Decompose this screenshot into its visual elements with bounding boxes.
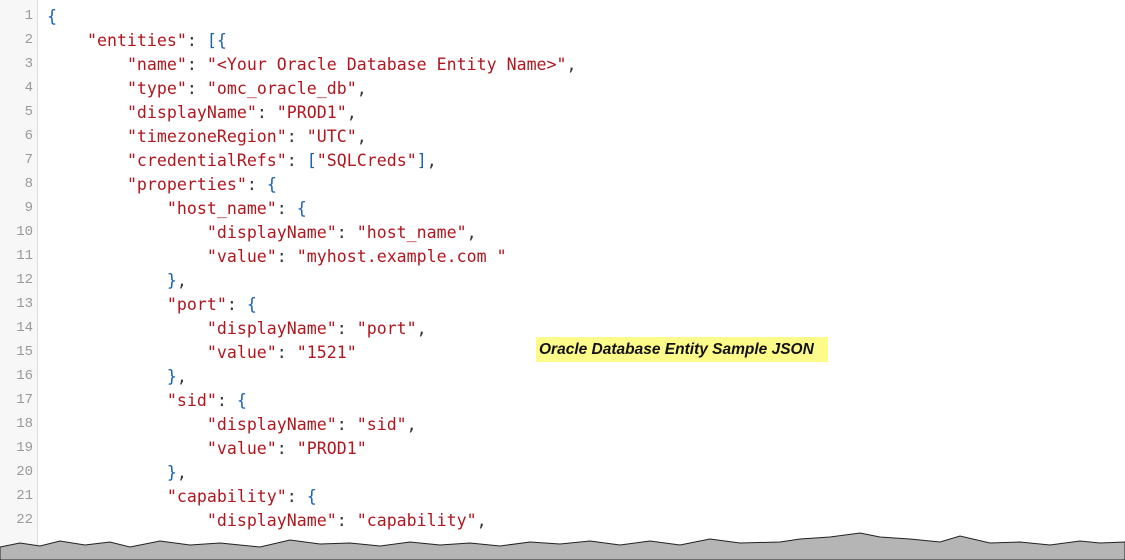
line number gutter: 14 [16, 320, 33, 336]
line number gutter: 17 [16, 392, 33, 408]
line number gutter: 1 [25, 8, 33, 24]
line number gutter: 4 [25, 80, 33, 96]
line number gutter: 6 [25, 128, 33, 144]
line number gutter: 5 [25, 104, 33, 120]
line number gutter: 10 [16, 224, 33, 240]
line number gutter: 9 [25, 200, 33, 216]
line number gutter: 19 [16, 440, 33, 456]
line number gutter: 12 [16, 272, 33, 288]
line number gutter: 3 [25, 56, 33, 72]
line number gutter: 8 [25, 176, 33, 192]
callout: caption [536, 337, 828, 362]
line number gutter: 21 [16, 488, 33, 504]
line number gutter: 16 [16, 368, 33, 384]
line number gutter: 11 [16, 248, 33, 264]
callout: caption: Oracle Database Entity Sample JSON [539, 341, 814, 358]
line number gutter: 7 [25, 152, 33, 168]
line number gutter: 18 [16, 416, 33, 432]
line number gutter: 15 [16, 344, 33, 360]
torn edge [0, 532, 1125, 560]
line number gutter: 22 [16, 512, 33, 528]
line number gutter: 20 [16, 464, 33, 480]
line number gutter [0, 0, 38, 560]
line number gutter: 2 [25, 32, 33, 48]
line number gutter: 13 [16, 296, 33, 312]
code block: JSON sample: { "entities": [{ "name": "<Your Oracle Database Entity Name>", "type": "omc_oracle_db", "displayName": "PROD1", "timezoneRegion": "UTC", "credentialRefs": ["SQLCreds"], "properties": { "host_name": { "displayName": "host_name", "value": "myhost.example.com " }, "port": { "displayName": "port", "value": "1521" }, "sid": { "displayName": "sid", "value": "PROD1" }, "capability": { "displayName": "capability", [47, 7, 577, 530]
